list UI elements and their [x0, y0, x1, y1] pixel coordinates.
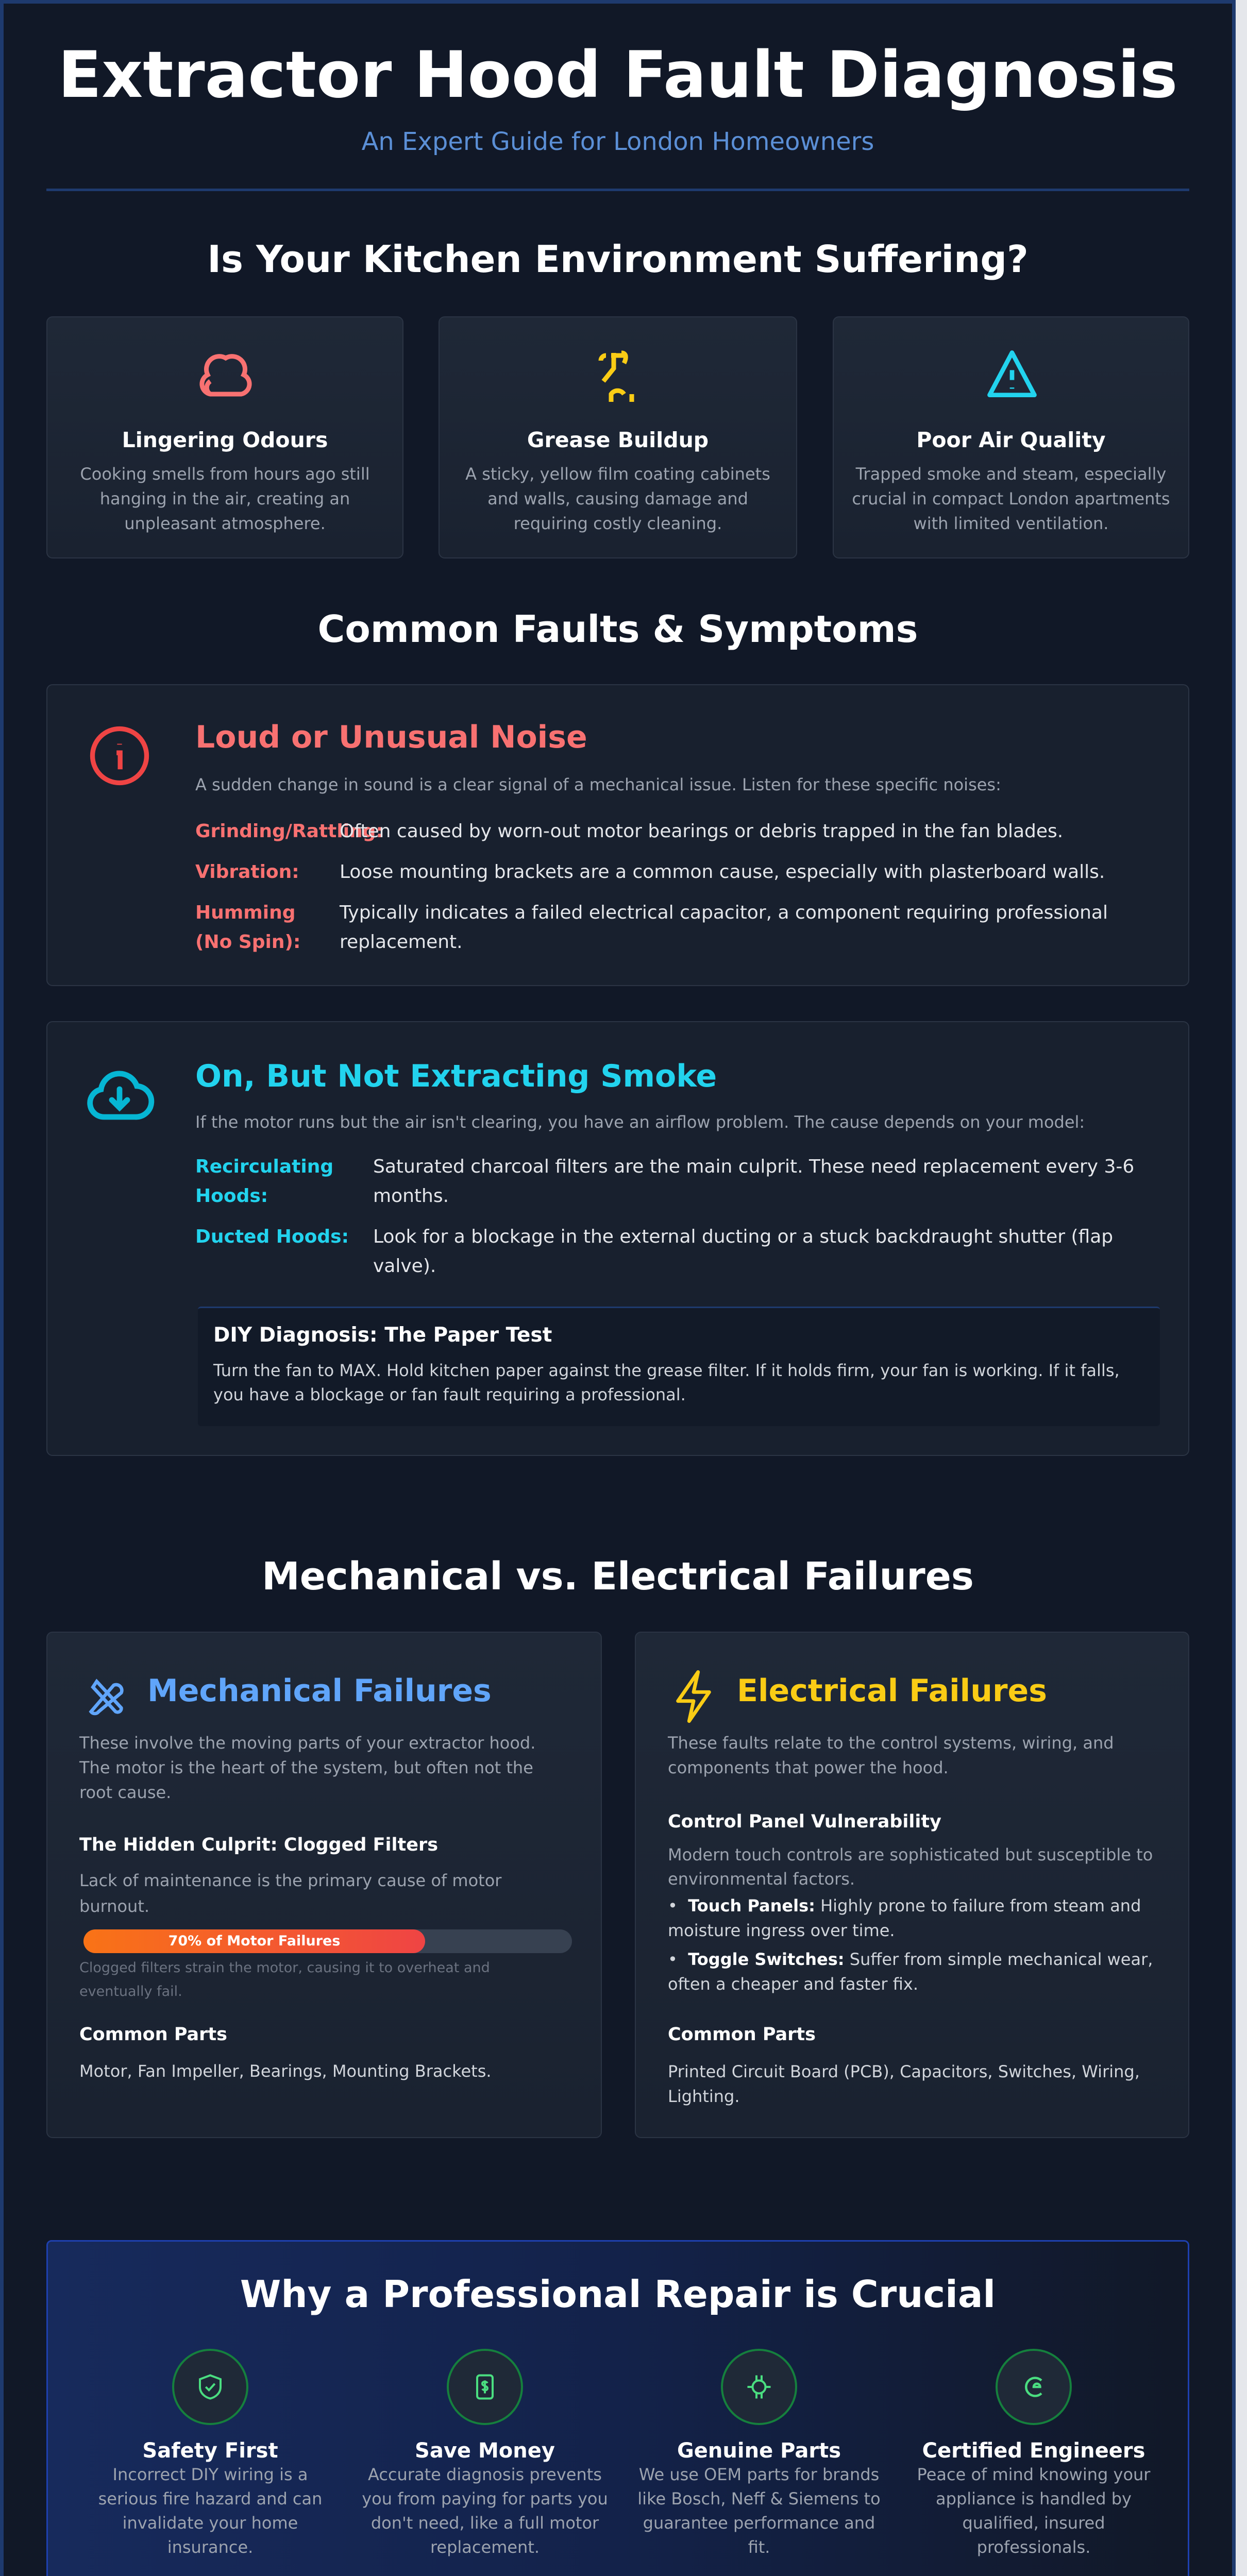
- hood types list: [195, 1156, 1134, 1277]
- symptom list: Vibration:: [195, 861, 299, 883]
- panel heading: Why a Professional Repair is Crucial: [240, 2273, 996, 2316]
- panel: loud noise: [46, 684, 1189, 986]
- fault title: Loud or Unusual Noise: [195, 719, 587, 755]
- bar chart: 70% of motor failures: 70% of Motor Failures: [168, 1933, 340, 1949]
- benefit: certified engineers: Peace of mind knowing your appliance is handled by qualified, insured professionals.: [917, 2465, 1150, 2557]
- heading: common faults: Common Faults & Symptoms: [318, 607, 918, 651]
- heading: kitchen environment: Is Your Kitchen Environment Suffering?: [207, 238, 1029, 281]
- card title: Grease Buildup: [527, 428, 709, 452]
- icon: odour cloud: [199, 354, 252, 397]
- symptom list: Loose mounting brackets are a common cause, especially with plasterboard walls.: [340, 861, 1105, 883]
- description: These involve the moving parts of your extractor hood. The motor is the heart of the system, but often not the root cause.: [79, 1733, 535, 1802]
- symptom list: [195, 821, 1108, 953]
- symptom list: Humming (No Spin):: [195, 902, 300, 953]
- bar chart: 70% of motor failures: [83, 1929, 572, 1953]
- benefit: genuine parts: [637, 2349, 881, 2557]
- title: Extractor Hood Fault Diagnosis: [58, 38, 1177, 112]
- description: These faults relate to the control systems, wiring, and components that power the hood.: [668, 1733, 1114, 1777]
- panel: electrical failures: [635, 1632, 1189, 2138]
- benefit: certified engineers: Certified Engineers: [922, 2439, 1145, 2463]
- benefit: safety first: [98, 2349, 322, 2557]
- fault intro: If the motor runs but the air isn't clearing, you have an airflow problem. The cause depends on your model:: [195, 1112, 1085, 1132]
- icon: lightning: [676, 1670, 711, 1723]
- symptom list: Grinding/Rattling:: [195, 821, 383, 842]
- benefit: save money: [362, 2349, 608, 2557]
- hood types list: Look for a blockage in the external ducting or a stuck backdraught shutter (flap valve).: [373, 1226, 1113, 1277]
- icon: wrench: [89, 1679, 124, 1716]
- callout: paper test: DIY Diagnosis: The Paper Test: [213, 1324, 552, 1347]
- subheading: Control Panel Vulnerability: [668, 1811, 941, 1832]
- subtitle: An Expert Guide for London Homeowners: [362, 127, 874, 156]
- heading: mechanical vs electrical: Mechanical vs. Electrical Failures: [262, 1554, 974, 1599]
- bullet list: [668, 1896, 1153, 1994]
- common parts: Common Parts: [79, 2024, 227, 2045]
- panel: mechanical failures: [46, 1632, 602, 2138]
- panel: poor air quality: [833, 316, 1189, 558]
- card text: Cooking smells from hours ago still hanging in the air, creating an unpleasant atmosphere.: [80, 464, 370, 533]
- panel: mechanical failures: Lack of maintenance is the primary cause of motor burnout.: [79, 1871, 501, 1916]
- card title: Poor Air Quality: [916, 428, 1106, 452]
- benefit: safety first: Safety First: [142, 2439, 278, 2463]
- icon: money: [447, 2349, 523, 2425]
- panel: lingering odours: [46, 316, 403, 558]
- benefit: save money: Save Money: [415, 2439, 555, 2463]
- benefit: genuine parts: We use OEM parts for brands like Bosch, Neff & Siemens to guarantee performance and fit.: [637, 2465, 881, 2557]
- panel: electrical failures: Printed Circuit Board (PCB), Capacitors, Switches, Wiring, Lighting.: [668, 2062, 1140, 2106]
- callout: paper test: [198, 1307, 1160, 1426]
- bar caption: Clogged filters strain the motor, causing it to overheat and eventually fail.: [79, 1960, 490, 1999]
- icon: warning: [987, 350, 1037, 397]
- panel: grease buildup: [439, 316, 797, 558]
- icon: badge: [996, 2349, 1072, 2425]
- panel: why professional repair: [46, 2240, 1189, 2576]
- icon: grease: [599, 350, 634, 402]
- card text: Trapped smoke and steam, especially crucial in compact London apartments with limited ventilation.: [852, 464, 1170, 533]
- panel: not extracting smoke: [46, 1021, 1189, 1456]
- icon: shield: [172, 2349, 248, 2425]
- panel: mechanical failures: Motor, Fan Impeller, Bearings, Mounting Brackets.: [79, 2061, 492, 2081]
- benefit: genuine parts: Genuine Parts: [677, 2439, 841, 2463]
- icon: chip: [721, 2349, 797, 2425]
- hood types list: Saturated charcoal filters are the main culprit. These need replacement every 3-6 months.: [373, 1156, 1134, 1207]
- benefit: certified engineers: [917, 2349, 1150, 2557]
- card text: A sticky, yellow film coating cabinets and walls, causing damage and requiring costly cleaning.: [465, 464, 770, 533]
- hood types list: Ducted Hoods:: [195, 1226, 349, 1247]
- bullet list: • Toggle Switches: Suffer from simple mechanical wear, often a cheaper and faster fix.: [668, 1950, 1153, 1994]
- symptom list: Often caused by worn-out motor bearings or debris trapped in the fan blades.: [340, 821, 1063, 842]
- section title: Mechanical Failures: [147, 1673, 492, 1709]
- common parts: Common Parts: [668, 2024, 816, 2045]
- benefit: save money: Accurate diagnosis prevents you from paying for parts you don't need, like a full motor replacement.: [362, 2465, 608, 2557]
- fault title: On, But Not Extracting Smoke: [195, 1058, 717, 1094]
- card title: Lingering Odours: [122, 428, 328, 452]
- subheading: The Hidden Culprit: Clogged Filters: [79, 1835, 438, 1855]
- bullet list: • Touch Panels: Highly prone to failure from steam and moisture ingress over time.: [668, 1896, 1141, 1940]
- callout: paper test: Turn the fan to MAX. Hold kitchen paper against the grease filter. If it holds firm, your fan is working. If it falls, you have a blockage or fan fault requiring a professional.: [213, 1361, 1120, 1404]
- hood types list: Recirculating Hoods:: [195, 1156, 333, 1207]
- symptom list: Typically indicates a failed electrical capacitor, a component requiring professional replacement.: [340, 902, 1108, 953]
- panel: electrical failures: Modern touch controls are sophisticated but susceptible to environmental factors.: [668, 1845, 1153, 1889]
- icon: cloud download: [87, 1071, 155, 1120]
- fault intro: A sudden change in sound is a clear signal of a mechanical issue. Listen for these specific noises:: [195, 775, 1001, 794]
- icon: info circle: [90, 726, 149, 785]
- benefit: safety first: Incorrect DIY wiring is a serious fire hazard and can invalidate your home insurance.: [98, 2465, 322, 2557]
- section title: Electrical Failures: [737, 1673, 1047, 1709]
